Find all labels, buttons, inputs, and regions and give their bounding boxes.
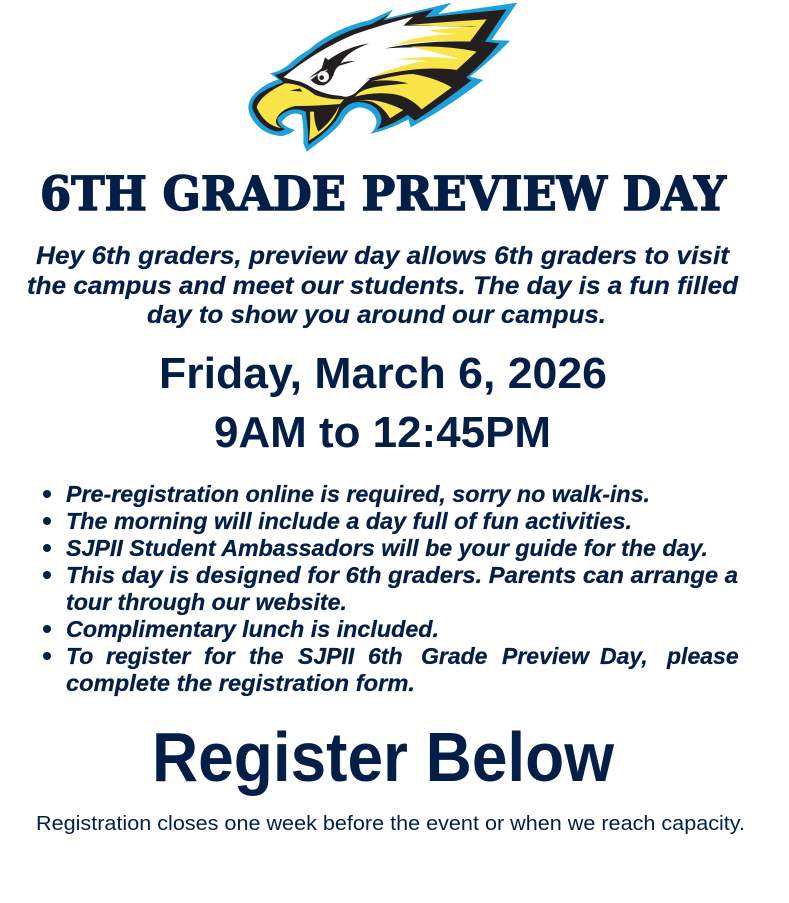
bullet list: The morning will include a day full of fun activities. [66, 508, 632, 534]
intro paragraph [27, 242, 739, 329]
bullet list: register [106, 643, 191, 669]
bullet list: SJPII Student Ambassadors will be your guide for the day. [66, 535, 708, 561]
bullet list: complete the registration form. [66, 670, 415, 696]
bullet list [43, 481, 739, 696]
bullet list: please [666, 643, 739, 669]
bullet list: To [66, 643, 93, 669]
intro paragraph: Hey 6th graders, preview day allows 6th graders to visit [36, 242, 731, 270]
bullet list: the [249, 643, 284, 669]
event date: Friday, March 6, 2026 [159, 349, 607, 398]
bullet list: SJPII [298, 643, 355, 669]
bullet list: Day, [600, 643, 648, 669]
bullet list: tour through our website. [66, 589, 347, 615]
title: 6TH GRADE PREVIEW DAY [40, 167, 726, 222]
icon: eagle head logo [248, 3, 517, 152]
bullet list: Complimentary lunch is included. [66, 616, 439, 642]
bullet list: 6th [368, 643, 402, 669]
bullet list: for [204, 643, 236, 669]
bullet list: Preview [502, 643, 591, 669]
bullet list: Grade [421, 643, 488, 669]
bullet list: This day is designed for 6th graders. Parents can arrange a [66, 562, 738, 588]
bullet list: Pre-registration online is required, sorry no walk-ins. [66, 481, 650, 507]
call to action heading: Register Below [152, 718, 614, 796]
intro paragraph: the campus and meet our students. The day is a fun filled [27, 272, 739, 300]
event time: 9AM to 12:45PM [214, 408, 551, 457]
registration note: Registration closes one week before the event or when we reach capacity. [36, 812, 745, 835]
intro paragraph: day to show you around our campus. [147, 301, 606, 329]
